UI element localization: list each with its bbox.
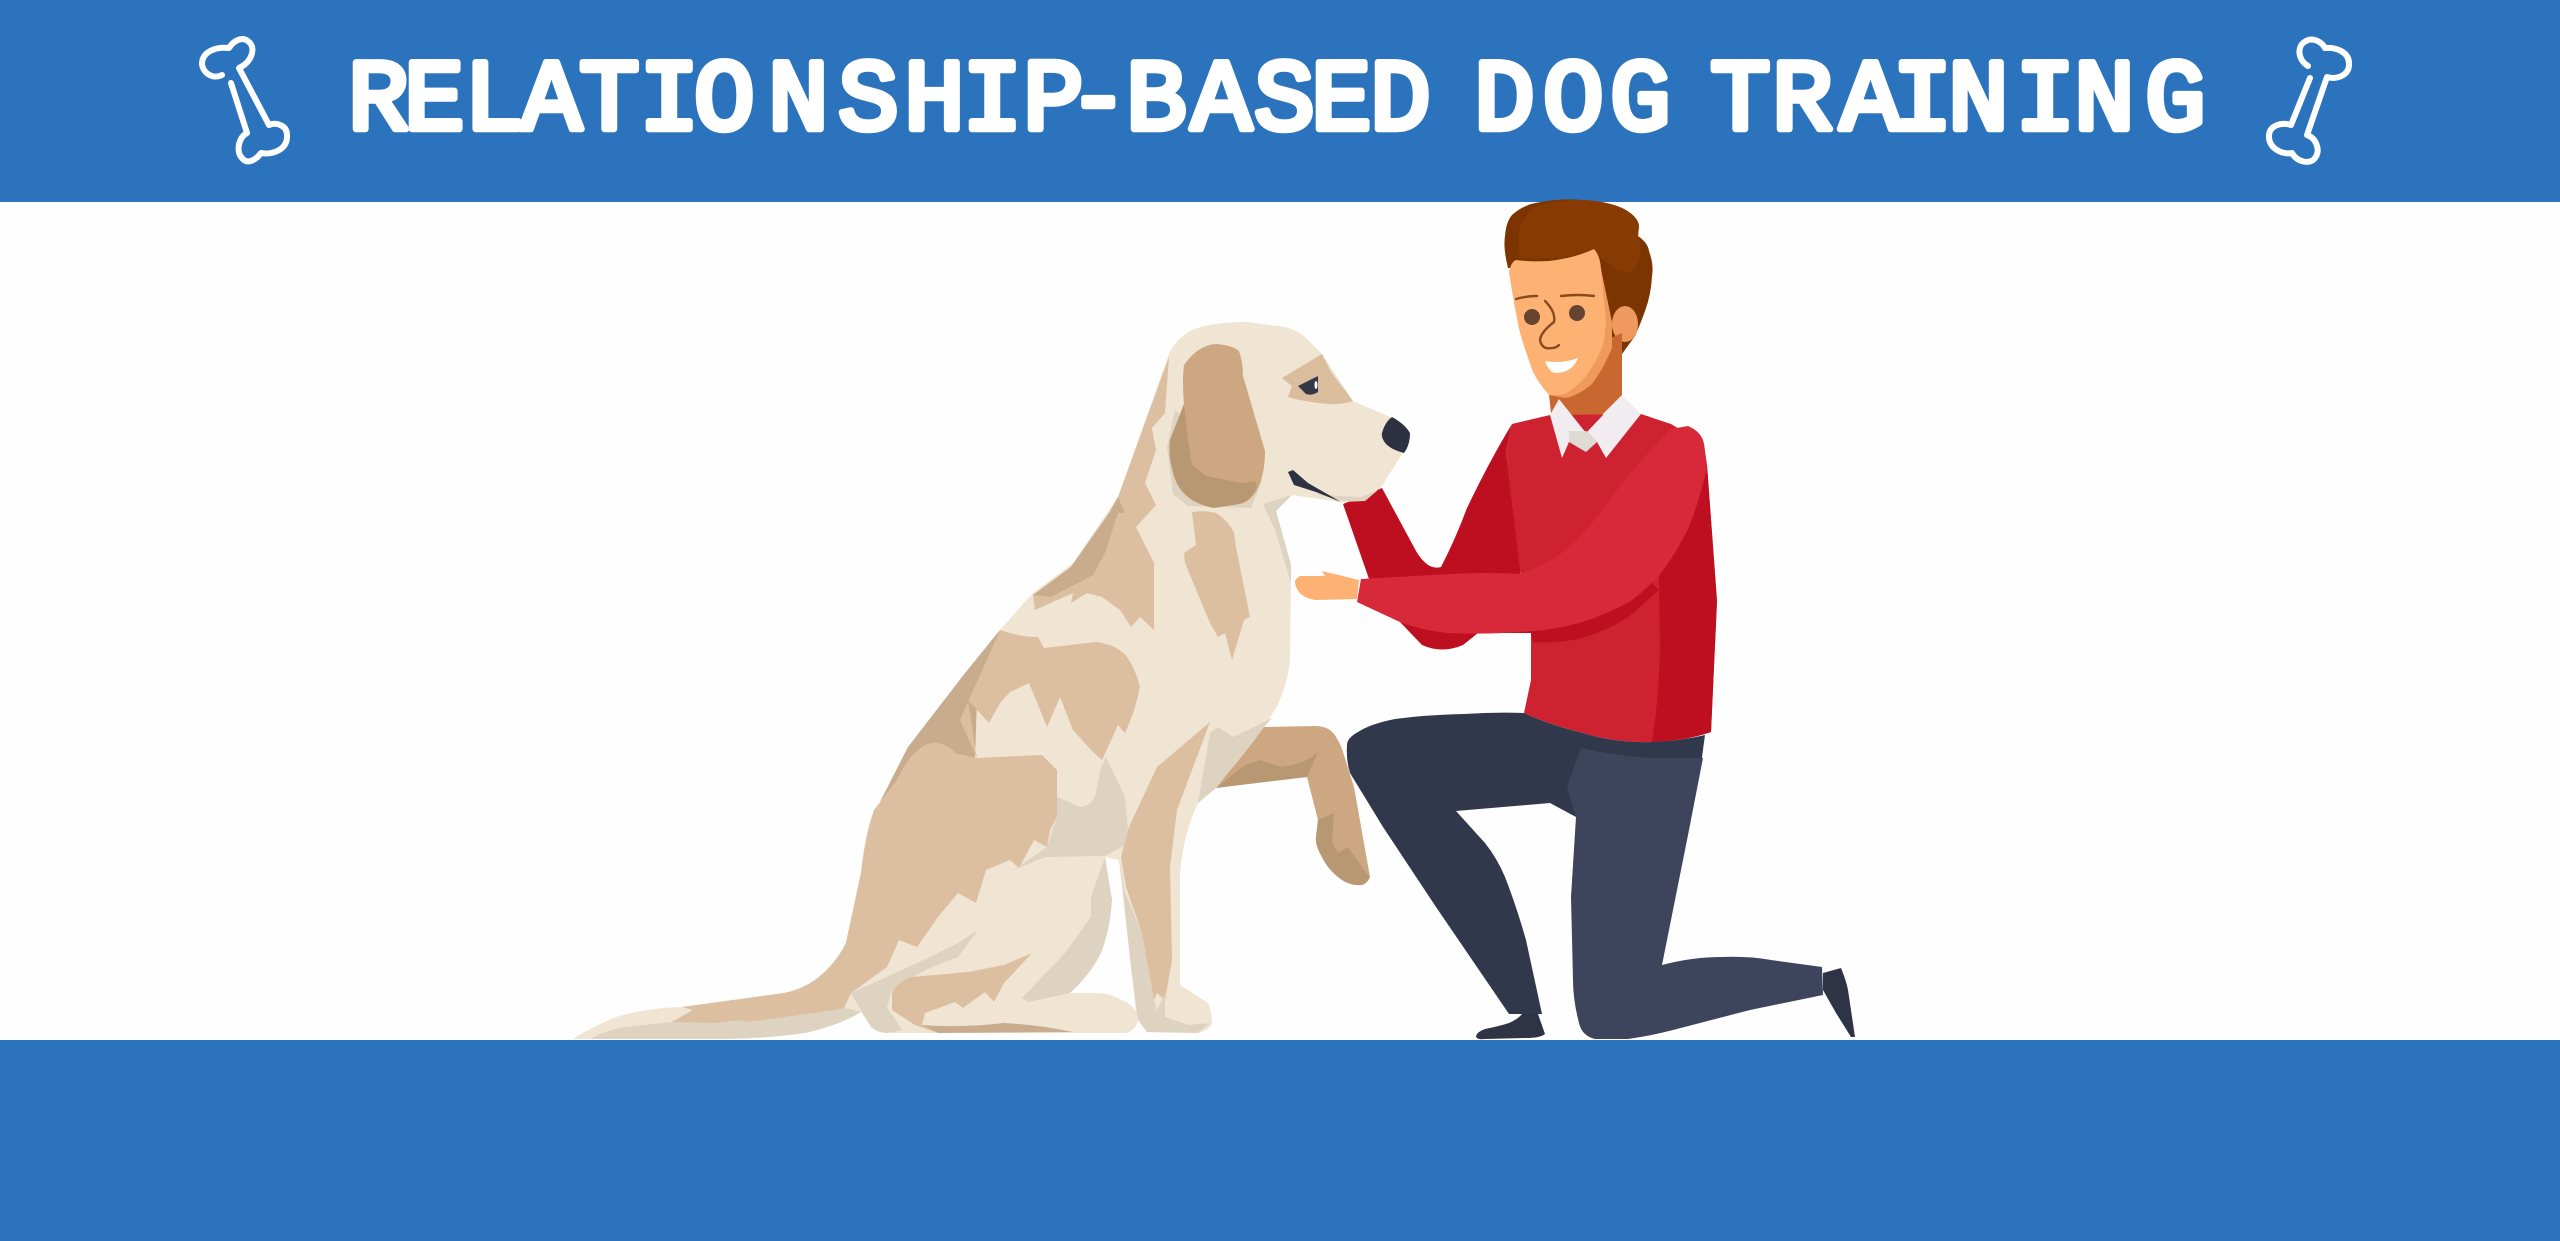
hind hip shade bbox=[851, 930, 978, 1033]
back leg dark trousers bbox=[1347, 713, 1705, 1014]
hand bbox=[1295, 571, 1359, 600]
under arm shadow bbox=[1400, 570, 1659, 650]
belly shade bbox=[1014, 757, 1129, 870]
hind leg shade bbox=[1022, 857, 1112, 1002]
footer band bbox=[0, 1040, 2560, 1241]
front shoe bbox=[1476, 1014, 1545, 1039]
foreleg shade bbox=[1119, 855, 1172, 1032]
dog mouth bbox=[1288, 470, 1341, 502]
eye patch bbox=[1282, 354, 1353, 404]
sweater torso bbox=[1506, 414, 1717, 742]
man eyes bbox=[1524, 305, 1585, 325]
back fur dark overlay bbox=[940, 630, 1000, 710]
throat shade bbox=[1263, 495, 1292, 583]
ear bbox=[1169, 344, 1265, 508]
raised paw shadow bbox=[1316, 813, 1370, 885]
man ear bbox=[1612, 306, 1638, 342]
icon: right bone bbox=[2269, 40, 2349, 162]
man hair bbox=[1504, 199, 1653, 354]
illustration: sitting dog bbox=[573, 322, 1410, 1039]
sweater dark side bbox=[1652, 465, 1717, 742]
dog eye bbox=[1298, 376, 1318, 395]
neck back patch bbox=[1033, 357, 1169, 630]
front leg light trousers bbox=[1567, 748, 1823, 1039]
title: RELATIONSHIP-BASED DOG TRAINING bbox=[348, 46, 2206, 160]
icon: left bone bbox=[202, 39, 287, 161]
tail underside bbox=[591, 1008, 861, 1039]
dog silhouette bbox=[573, 322, 1402, 1039]
shoulder patch bbox=[960, 630, 1140, 760]
back dark fur bbox=[846, 630, 1000, 943]
gap between hind and front legs bbox=[1060, 857, 1136, 1012]
collar inner bbox=[1569, 431, 1597, 452]
shirt collar bbox=[1550, 395, 1641, 458]
haunch and tail fur bbox=[670, 743, 1057, 1030]
neck front patch bbox=[1184, 511, 1250, 660]
dog jaw shade bbox=[1316, 490, 1378, 501]
man neck bbox=[1549, 333, 1622, 433]
eye glint bbox=[1314, 381, 1318, 389]
illustration: kneeling man bbox=[1295, 199, 1855, 1039]
right arm bbox=[1357, 426, 1707, 634]
man brows and nose bbox=[1516, 295, 1594, 348]
back shoe bbox=[1823, 968, 1855, 1037]
dog nose bbox=[1382, 417, 1410, 453]
raised paw bbox=[1216, 726, 1370, 885]
neck dark patch bbox=[1033, 497, 1125, 597]
ear dark fur bbox=[1169, 404, 1257, 508]
left arm bbox=[1343, 424, 1520, 579]
under ear shade bbox=[1167, 410, 1262, 508]
hind paw stripe bbox=[922, 1023, 1073, 1033]
man face shadow bbox=[1549, 269, 1612, 398]
man smile bbox=[1545, 358, 1578, 373]
raised leg shadow bbox=[1216, 752, 1318, 788]
front paw shade bbox=[1147, 993, 1210, 1033]
foreleg tan bbox=[1121, 722, 1210, 1000]
man face bbox=[1509, 249, 1606, 395]
chest shade bbox=[1198, 718, 1272, 803]
man hair highlight bbox=[1518, 200, 1641, 272]
header band bbox=[0, 0, 2560, 202]
hind paw tan bbox=[892, 953, 1032, 1033]
